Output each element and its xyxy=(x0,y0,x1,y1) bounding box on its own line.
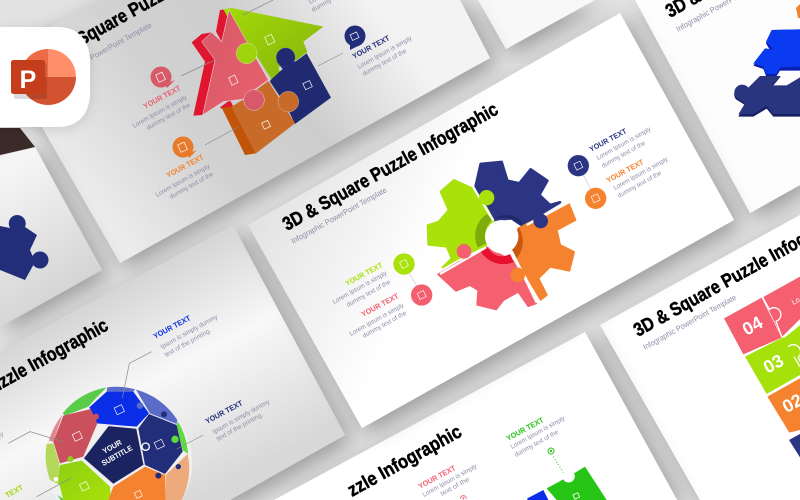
callout: green text: dummy text of the xyxy=(514,429,560,459)
slide title: gear: 3D & Square Puzzle Infographic xyxy=(279,99,502,235)
gear: center hole xyxy=(485,220,518,253)
ball: icons xyxy=(72,405,165,498)
callout: blue text: text of the printing. xyxy=(164,327,213,359)
callout: navy text xyxy=(204,398,272,443)
piece 03: 03 xyxy=(760,350,787,377)
callout: left green text xyxy=(0,430,25,500)
gear: orange piece xyxy=(512,203,575,300)
slide subtitle: squares: Infographic PowerPoint Template xyxy=(642,293,738,352)
callout: orange text: Lorem Ipsum is simply xyxy=(613,156,670,192)
gear: navy piece xyxy=(476,162,560,227)
callout: navy text: Lorem Ipsum is simply xyxy=(596,126,653,162)
callout: pink text: YOUR TEXT xyxy=(417,463,457,491)
piece 04 xyxy=(724,298,782,354)
piece 04: 04 xyxy=(739,312,766,339)
slide subtitle: house: Infographic PowerPoint Template xyxy=(55,20,154,81)
ball: leader lines xyxy=(8,352,203,497)
callout: green text: Lorem Ipsum is simply xyxy=(332,270,389,306)
icon: PowerPoint circle xyxy=(14,49,76,105)
ball: knobs xyxy=(54,402,181,482)
callout: pink text: Lorem Ipsum is simply xyxy=(422,463,479,499)
callout: navy text xyxy=(588,126,653,170)
orange piece xyxy=(796,4,800,18)
puzzle ball xyxy=(8,352,203,500)
piece 01 xyxy=(789,434,800,457)
square puzzle xyxy=(724,277,800,457)
green piece xyxy=(547,467,607,500)
callout: orange text: Lorem Ipsum is simply xyxy=(155,163,212,199)
callout: orange text xyxy=(155,136,215,201)
callout: pink text: Lorem Ipsum is simply xyxy=(349,302,406,338)
slide: 3D puzzle pieces xyxy=(635,0,800,213)
gear: knobs xyxy=(457,190,548,282)
piece 03 xyxy=(745,323,800,394)
callout: navy text xyxy=(344,26,414,78)
callout: blue text: YOUR TEXT xyxy=(152,313,192,341)
ball: center subtitle xyxy=(83,426,144,484)
callout: pink text: YOUR TEXT xyxy=(360,291,400,319)
house: navy piece xyxy=(270,53,331,124)
gear: pink piece xyxy=(438,247,536,309)
callout: green text: dummy text of the xyxy=(346,279,392,309)
house: red side faces xyxy=(192,9,233,116)
ball: red piece xyxy=(53,409,99,463)
dark image strip xyxy=(0,128,35,155)
callout: orange text: dummy text of the xyxy=(617,170,663,200)
slide: gear puzzle xyxy=(248,13,734,428)
callout: green text: YOUR TEXT xyxy=(505,415,545,443)
ball: outer rim pieces xyxy=(46,387,189,500)
piece 02 xyxy=(767,378,800,433)
slide: bottom jigsaw xyxy=(274,332,677,500)
blue 3D piece xyxy=(753,29,800,76)
callout: blue text xyxy=(152,313,220,359)
ball: navy piece xyxy=(138,411,183,474)
PowerPoint app icon xyxy=(0,27,90,127)
slide subtitle: gear: Infographic PowerPoint Template xyxy=(290,185,389,246)
house: green piece xyxy=(223,8,323,79)
callout: orange text: YOUR TEXT xyxy=(165,152,205,180)
icon: green circle xyxy=(393,253,422,295)
callout: orange text xyxy=(605,156,670,200)
callout: navy text: dummy text of the xyxy=(601,140,647,170)
icon: PowerPoint P tile: P xyxy=(20,66,36,94)
callout: navy text: Lorem Ipsum is simply xyxy=(357,35,414,71)
callout: orange text: dummy text of the xyxy=(169,171,215,201)
slide: house puzzle xyxy=(0,0,490,263)
puzzle house xyxy=(192,8,331,155)
callout: navy text: YOUR TEXT xyxy=(351,33,391,61)
house: orange side face xyxy=(222,107,256,155)
green target and dotted line xyxy=(548,448,563,473)
callout: pink text: dummy text of the xyxy=(362,310,408,340)
gear: green piece xyxy=(428,180,493,267)
callout: pink text: YOUR TEXT xyxy=(142,83,182,111)
house: pink piece xyxy=(202,10,268,115)
callout: navy text: Ipsum is simply dummy xyxy=(212,398,272,436)
callout: pink text: text of the xyxy=(440,476,471,498)
slide: soccer ball puzzle xyxy=(0,225,345,500)
slide: bottom square puzzle xyxy=(600,205,800,500)
icon: house glyphs xyxy=(229,34,312,129)
ball: center subtitle: SUBTITLE xyxy=(100,443,134,468)
ball: green piece xyxy=(58,456,111,500)
blue piece xyxy=(527,490,548,500)
pink target xyxy=(460,496,466,499)
callout: left green text: TEXT xyxy=(4,483,25,500)
ball: base xyxy=(45,387,192,500)
callout: pink text: Lorem Ipsum is simply xyxy=(132,94,189,130)
slide: lower-left navy puzzle xyxy=(0,128,102,327)
callout: green text: YOUR TEXT xyxy=(344,260,384,288)
slide title: jigsaw: zzle Infographic xyxy=(344,421,466,500)
house: knobs xyxy=(236,43,299,112)
navy puzzle piece xyxy=(0,215,48,280)
callout: green text: Lorem Ipsum is simply xyxy=(510,415,567,451)
leader lines: house xyxy=(181,0,343,145)
callout: navy text: YOUR TEXT xyxy=(204,398,244,426)
callout: blue text: Ipsum is simply dummy xyxy=(160,313,220,351)
ball: center subtitle: YOUR xyxy=(101,438,124,456)
callout: navy text: YOUR TEXT xyxy=(588,126,628,154)
callout: pink text: dummy text of the xyxy=(146,102,192,132)
callout: green text xyxy=(505,415,567,459)
callout: orange text: YOUR TEXT xyxy=(605,157,645,185)
slide: top sliver xyxy=(478,0,595,49)
icon: navy circle xyxy=(568,155,596,198)
jigsaw pieces xyxy=(460,448,607,500)
icon: pink circle xyxy=(411,284,432,306)
gear xyxy=(393,155,606,309)
house: orange piece xyxy=(232,81,295,153)
piece: pink right xyxy=(763,277,800,337)
navy 3D piece xyxy=(734,76,800,117)
icon: orange circle xyxy=(585,188,606,209)
gear: white seams xyxy=(440,187,572,303)
ball: orange piece xyxy=(108,467,166,500)
ball: blue piece xyxy=(89,392,149,427)
callout: pink text xyxy=(132,66,192,132)
callout: navy text: dummy text of the xyxy=(362,48,408,78)
callout: navy text: text of the printing. xyxy=(216,411,265,443)
